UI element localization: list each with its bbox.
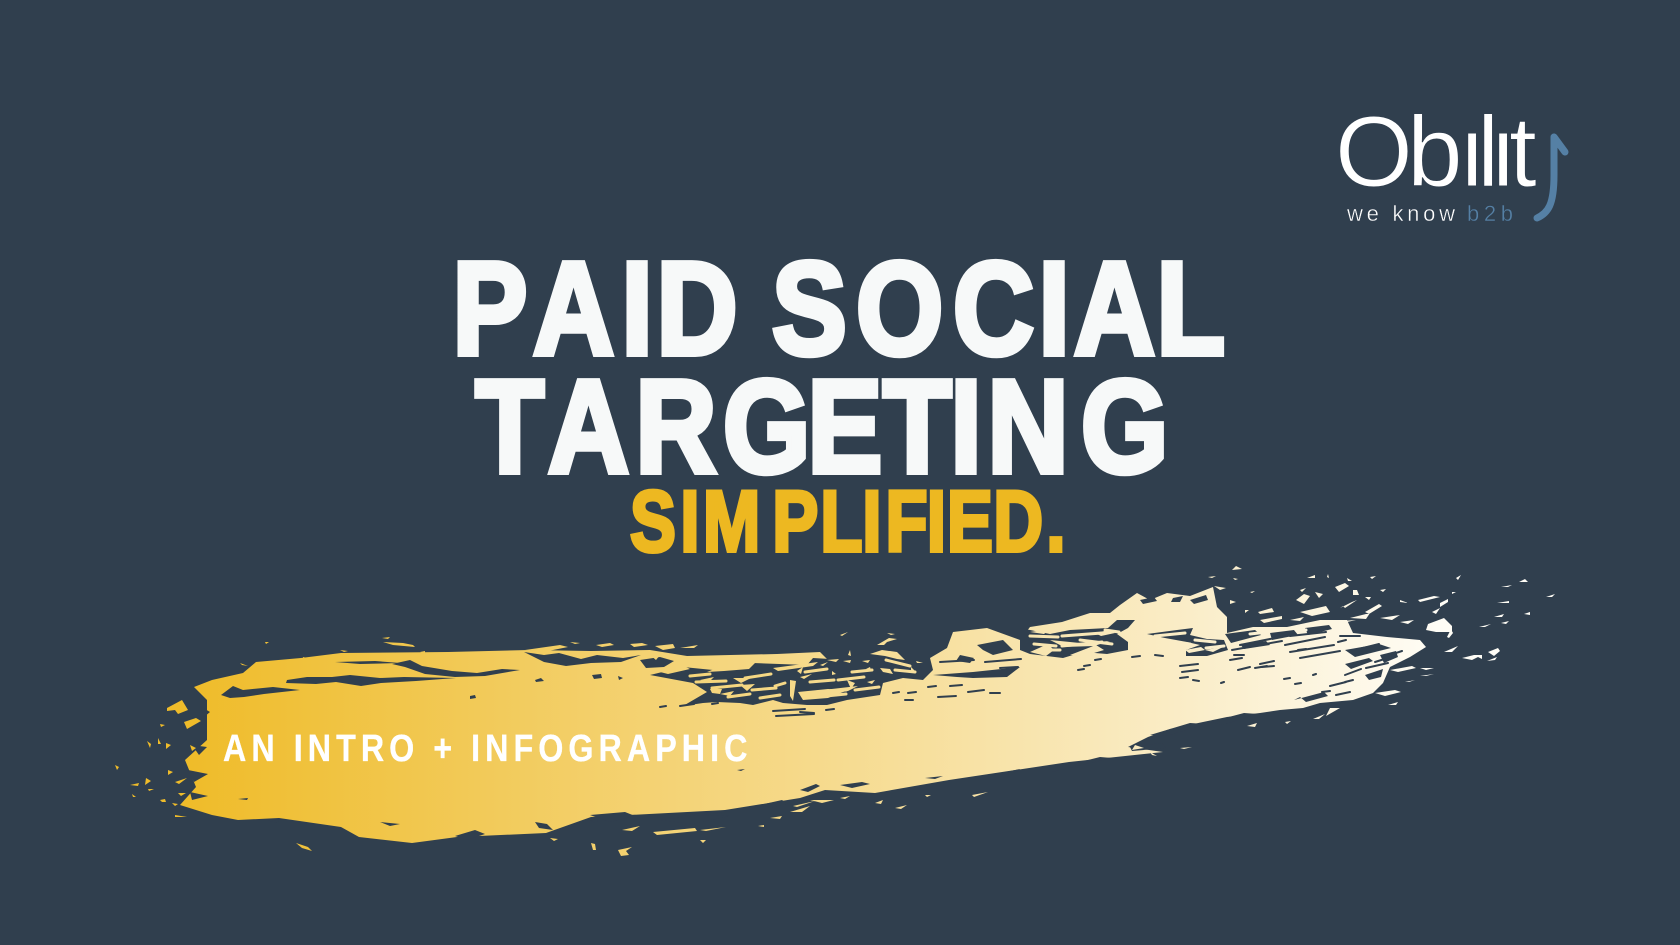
subtitle on brush: AN INTRO + INFOGRAPHIC — [223, 728, 747, 770]
light streaks across the gaps — [690, 630, 1306, 698]
title line: paid social: PAID SOCIAL — [453, 234, 1225, 382]
icon: logo arrow — [1537, 137, 1565, 218]
outer brush flecks — [115, 566, 1555, 856]
thin dark streaks — [660, 632, 1402, 716]
logo tagline: b2b — [1467, 201, 1513, 226]
logo: obility: Obilit — [1335, 96, 1537, 208]
brush stroke — [115, 566, 1555, 856]
highlighted word: simplified: SIMPLIFIED. — [630, 474, 1066, 570]
logo tagline: we know — [1346, 201, 1455, 226]
dark gaps in the brush — [188, 595, 1398, 840]
title line: targeting: TARGETING — [475, 352, 1168, 500]
